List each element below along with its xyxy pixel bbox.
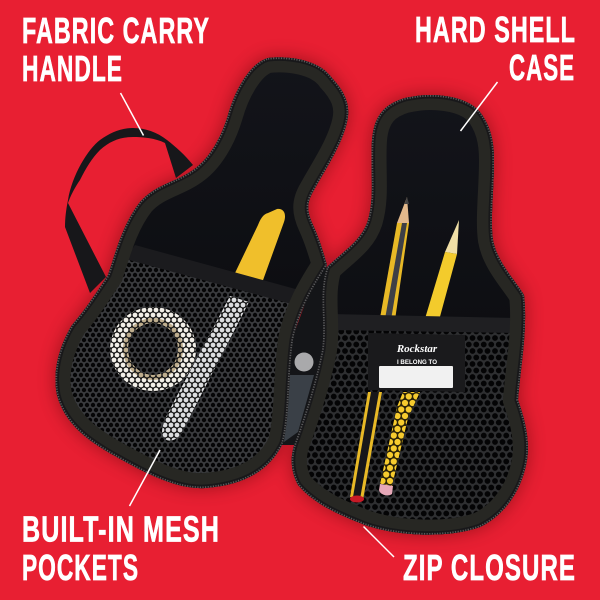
callout: zip closure bbox=[364, 526, 576, 588]
callout: built-in mesh pockets bbox=[22, 450, 220, 588]
case shadow bbox=[55, 57, 528, 535]
pencil below pocket bbox=[350, 392, 382, 502]
name tag caption: I BELONG TO bbox=[397, 359, 437, 366]
callout: built-in mesh pockets: BUILT-IN MESH bbox=[22, 508, 220, 550]
zipper spine between halves bbox=[282, 262, 332, 445]
left zipper bbox=[55, 57, 348, 488]
yellow pen below pocket bbox=[379, 392, 420, 495]
right case half bbox=[292, 95, 528, 535]
yellow marker above pocket bbox=[235, 209, 285, 283]
left pocket band bbox=[125, 245, 310, 309]
name tag bbox=[368, 333, 465, 392]
callout: fabric carry handle: HANDLE bbox=[22, 48, 123, 89]
callout: fabric carry handle bbox=[22, 10, 210, 136]
callout: hard shell case bbox=[415, 9, 576, 131]
pencil above pocket bbox=[380, 197, 409, 320]
name tag white field bbox=[379, 366, 453, 388]
zipper pull bbox=[294, 352, 314, 372]
left mesh pocket bbox=[40, 57, 348, 500]
callout: fabric carry handle: FABRIC CARRY bbox=[22, 10, 210, 51]
carry handle strap bbox=[65, 128, 193, 293]
right fabric rim bbox=[292, 95, 528, 535]
left fabric rim bbox=[55, 57, 348, 488]
right mesh pocket bbox=[292, 330, 528, 535]
right zipper bbox=[292, 95, 528, 535]
left case half bbox=[40, 57, 348, 500]
silver marker behind mesh bbox=[162, 296, 249, 441]
washi tape ring behind mesh bbox=[110, 307, 196, 391]
yellow pen above pocket bbox=[426, 220, 459, 316]
callout: built-in mesh pockets: POCKETS bbox=[22, 547, 139, 588]
name tag brand: Rockstar bbox=[396, 343, 438, 355]
right pocket band bbox=[330, 314, 515, 333]
